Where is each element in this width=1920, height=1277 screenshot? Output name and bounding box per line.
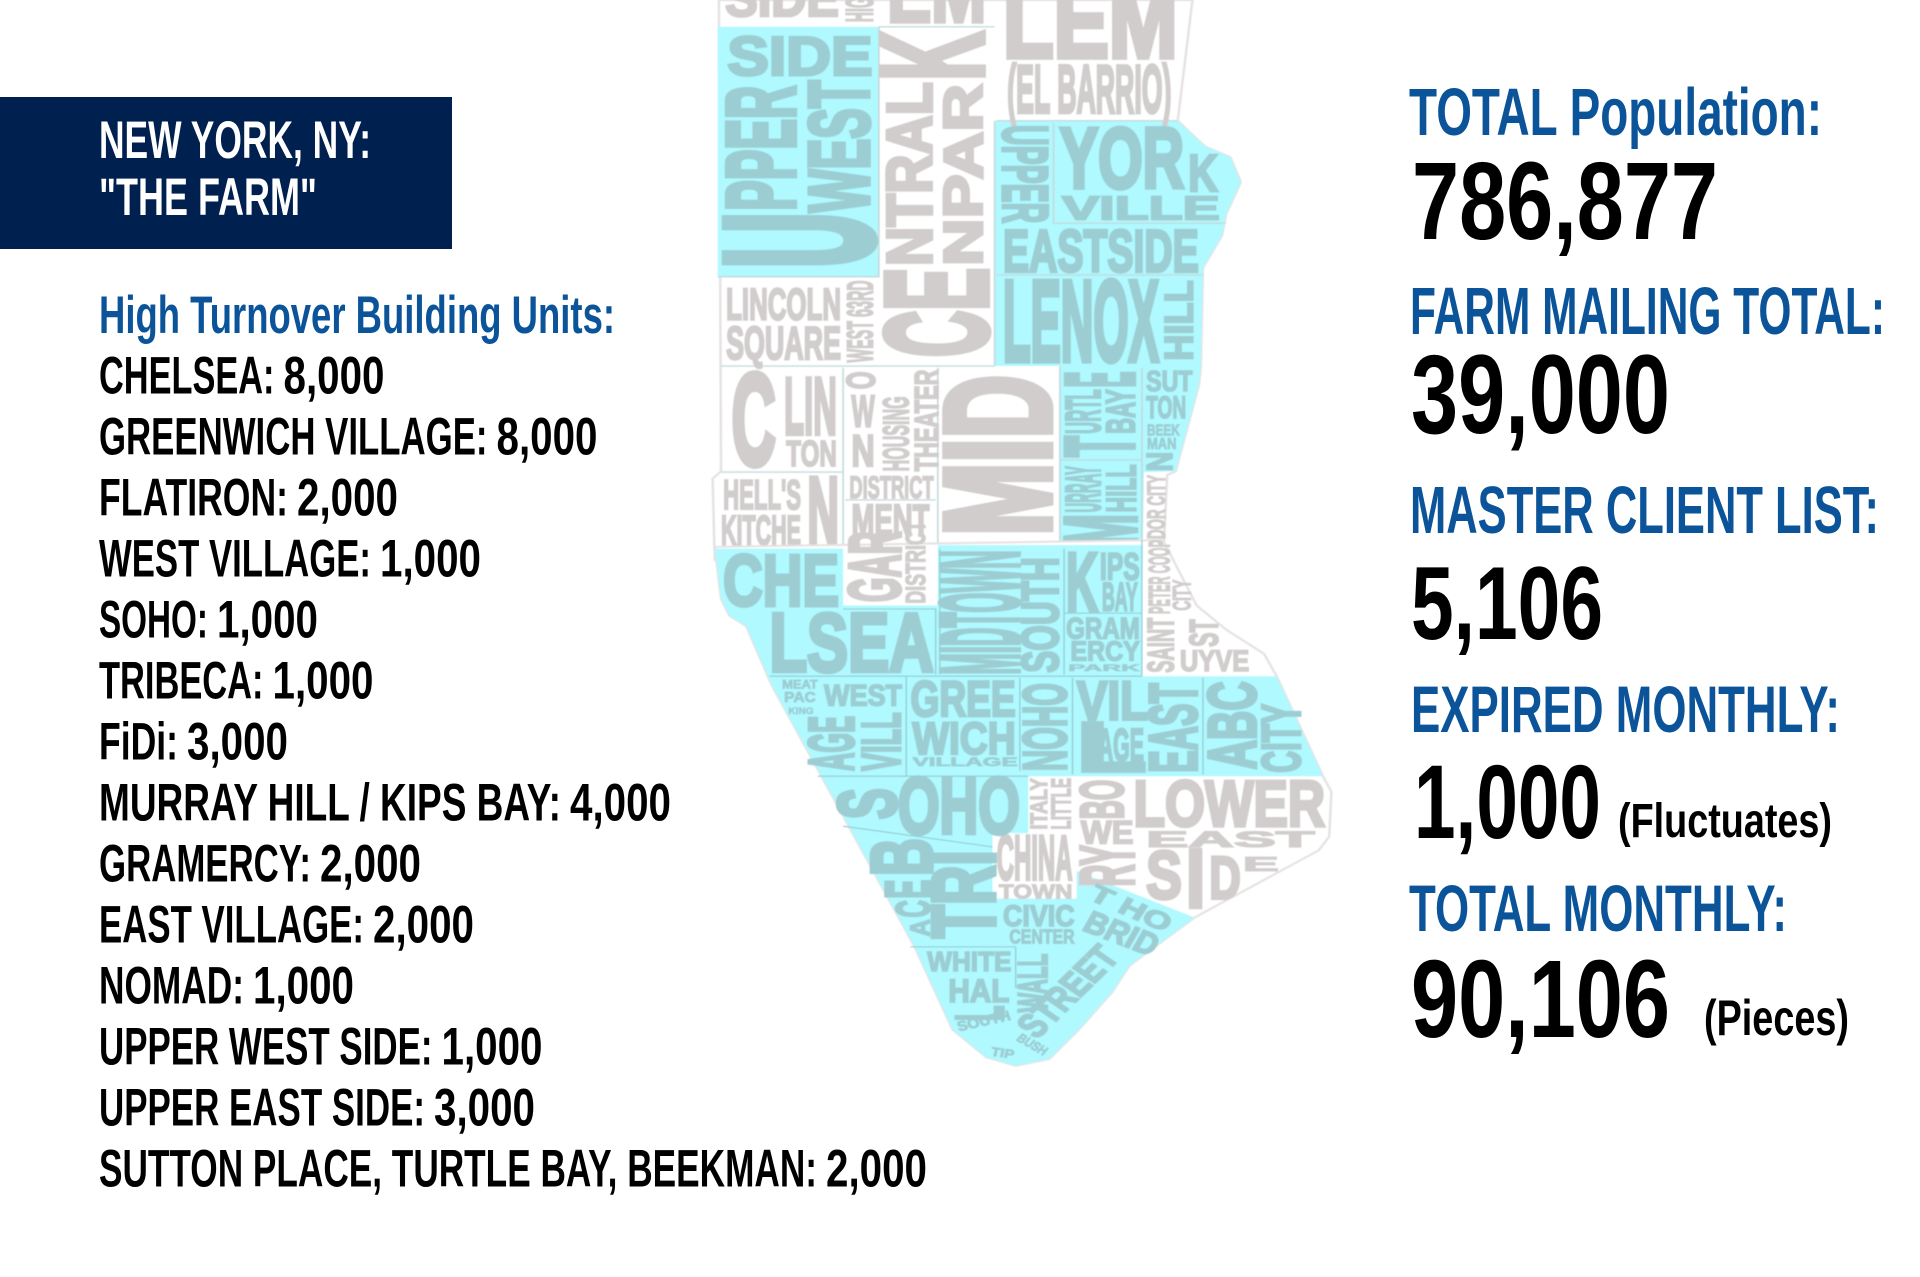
teal neighborhood labels lower: GREE [910,671,1016,727]
teal neighborhood labels lower: T HO [1084,880,1178,937]
teal neighborhood labels lower: BUSH [1014,1030,1051,1058]
map lower section [715,521,1331,1066]
teal neighborhood labels upper: EASTSIDE [1003,217,1199,284]
stat: total monthly: 90,106 [1411,938,1670,1061]
teal neighborhood labels upper: T [1046,436,1155,457]
list: building units by neighborhood: 2,000 [373,896,474,955]
list: building units by neighborhood: 4,000 [570,774,671,833]
teal neighborhood labels lower: C [887,900,940,918]
gray neighborhood labels upper: MID [915,375,1082,536]
teal neighborhood labels lower: SOUTH [955,1008,1013,1035]
stat: total monthly: (Pieces) [1704,990,1849,1046]
gray neighborhood labels lower: TOWN [999,881,1072,903]
list: building units by neighborhood: 3,000 [187,713,288,772]
teal neighborhood labels lower: VILL [850,712,912,771]
gray neighborhood labels upper [721,0,1178,566]
gray neighborhood labels lower [834,521,1325,925]
teal neighborhood labels upper: HILL [1157,280,1201,361]
teal neighborhood labels upper: WEST [791,80,887,212]
heading: high turnover building units: High Turnover Building Units: [99,286,615,345]
list: building units by neighborhood: CHELSEA: [99,347,274,406]
gray neighborhood labels upper: THEATER [908,370,945,471]
teal neighborhood labels upper: MAN [1147,435,1176,453]
gray neighborhood labels upper: MENT [852,496,930,546]
teal neighborhood labels lower: GRAM [1066,612,1140,645]
teal neighborhood labels upper: URRAY [1056,466,1111,512]
title banner [0,97,452,249]
teal neighborhood labels lower: CHE [723,541,839,622]
teal neighborhood labels lower: CENTER [1009,925,1075,948]
gray neighborhood labels lower: BO [1068,780,1136,819]
stat: total population: 786,877 [1412,140,1718,263]
map upper section [682,0,1241,566]
list: building units by neighborhood: SOHO: [99,591,208,650]
teal neighborhood labels upper: UPPER [989,125,1061,223]
teal neighborhood labels lower: L [1077,707,1146,786]
list: building units by neighborhood: WEST VILLAGE: [99,530,371,589]
teal neighborhood labels lower: STREET [1008,938,1128,1045]
highlighted zones lower [715,545,1323,1066]
teal neighborhood labels lower: VILLAGE [913,754,1018,769]
teal neighborhood labels upper: M [1044,514,1157,546]
list: building units by neighborhood: GREENWICH VILLAGE: [99,408,487,467]
title text: "THE FARM" [99,168,317,227]
gray neighborhood labels lower: LOWER [1134,768,1325,841]
list: building units by neighborhood: 3,000 [434,1079,535,1138]
map upper section: LENOX [1003,258,1159,385]
gray neighborhood labels upper: N [807,459,839,566]
teal neighborhood labels lower: EAST [1136,683,1212,773]
gray neighborhood labels lower: ITALY [1025,778,1053,830]
teal neighborhood labels upper: HILL [1099,464,1145,512]
teal neighborhood labels lower: WHITE [927,946,1011,977]
gray neighborhood labels lower: GAR [834,531,916,602]
teal neighborhood labels lower: AGE [1098,719,1144,771]
teal neighborhood labels lower: ABC [1195,681,1271,769]
stat: farm mailing total [1410,274,1885,457]
list: building units by neighborhood: 2,000 [826,1140,927,1199]
list: building units by neighborhood: 1,000 [442,1018,542,1077]
map: Manhattan neighborhoods typographic map [682,0,1331,1066]
gray neighborhood labels upper: TON [786,434,837,474]
list: building units by neighborhood: FiDi: [99,713,178,772]
teal neighborhood labels lower: WALL [1010,954,1057,1012]
list: building units by neighborhood: 1,000 [253,957,354,1016]
gray neighborhood labels upper: HOUSING [877,396,917,471]
teal neighborhood labels lower: HAL [948,972,1009,1009]
teal neighborhood labels lower: LSEA [769,596,934,689]
list: building units by neighborhood: UPPER WEST SIDE: [99,1018,432,1077]
teal neighborhood labels upper [682,26,1220,546]
teal neighborhood labels lower: B [854,838,950,876]
gray neighborhood labels upper: HELL'S [723,471,801,518]
teal neighborhood labels lower [723,535,1312,1061]
gray neighborhood labels lower: CHINA [997,823,1072,893]
teal neighborhood labels lower: E [874,880,944,899]
teal neighborhood labels lower: K [1066,535,1098,629]
teal neighborhood labels lower: A [905,919,936,937]
island outline upper [713,0,1241,560]
stat: farm mailing total: 39,000 [1411,332,1670,457]
list: building units by neighborhood: 8,000 [496,408,598,467]
gray neighborhood labels lower: RY [1065,845,1150,887]
teal neighborhood labels lower: TRI [916,850,1014,938]
teal neighborhood labels lower: TIP [990,1044,1016,1061]
teal neighborhood labels lower: PARK [1068,664,1142,674]
gray neighborhood labels lower: LITTLE [1046,778,1077,830]
teal neighborhood labels upper: U [682,212,915,268]
gray neighborhood labels upper: KITCHE [721,507,801,554]
teal neighborhood labels lower: NOHO [1011,683,1079,771]
list: building units by neighborhood: 1,000 [380,530,481,589]
gray neighborhood labels lower: ST [1182,619,1226,647]
highlighted zones upper [718,27,1241,550]
stat: total monthly [1409,871,1849,1061]
map: Manhattan neighborhoods typographic map: MIDTOWN [919,550,1042,674]
teal neighborhood labels lower: MEAT [782,677,818,691]
stat: master client list: 5,106 [1411,546,1603,662]
list: building units by neighborhood: 2,000 [320,835,421,894]
stat: expired monthly [1411,672,1840,861]
gray neighborhood labels lower: I [1186,832,1205,925]
teal neighborhood labels upper: N [1141,452,1181,471]
list: building units by neighborhood [99,347,927,1199]
gray neighborhood labels upper: TUDOR CITY [1142,475,1170,557]
gray neighborhood labels upper: NPAR [932,84,994,266]
teal neighborhood labels upper: BEEK [1147,421,1180,439]
list: building units by neighborhood: SUTTON PLACE, TURTLE BAY, BEEKMAN: [99,1140,817,1199]
teal neighborhood labels lower: BRID [1077,905,1165,963]
gray neighborhood labels upper: LIN [784,362,837,451]
gray neighborhood labels lower: SAINT [1142,617,1182,673]
teal neighborhood labels lower: CITY [1249,704,1312,773]
list: building units by neighborhood: FLATIRON: [99,469,288,528]
gray neighborhood labels upper: WEST 63RD [841,280,881,362]
map: Manhattan neighborhoods typographic map: (EL BARRIO) [1007,51,1171,127]
gray neighborhood labels upper: DISTRICT [849,471,934,505]
teal neighborhood labels upper: VILLE [1062,189,1220,227]
stat: expired monthly: (Fluctuates) [1618,795,1832,848]
list: building units by neighborhood: 1,000 [272,652,374,711]
list: building units by neighborhood: NOMAD: [99,957,244,1016]
list: building units by neighborhood: GRAMERCY: [99,835,311,894]
stat: total population [1409,75,1822,263]
list: building units by neighborhood: TRIBECA: [99,652,264,711]
teal neighborhood labels lower: L [943,1005,1018,1021]
gray neighborhood labels lower: WE [1081,814,1134,851]
teal neighborhood labels upper: SIDE [727,26,873,87]
teal neighborhood labels lower: AGE [797,716,868,771]
list: building units by neighborhood: UPPER EAST SIDE: [99,1079,425,1138]
teal neighborhood labels upper: E [1046,371,1155,387]
gray neighborhood labels upper: W [852,387,875,437]
teal neighborhood labels lower: WEST [824,680,902,713]
teal neighborhood labels lower: S [821,788,913,819]
list: building units by neighborhood: 2,000 [297,469,398,528]
teal neighborhood labels lower: KING [788,707,814,717]
teal neighborhood labels lower: OHO [898,760,1020,850]
teal neighborhood labels lower: BAY [1102,576,1138,620]
gray neighborhood labels lower: DISTRICT [901,521,932,604]
list: building units by neighborhood: MURRAY HILL / KIPS BAY: [99,774,561,833]
teal neighborhood labels lower: PAC [784,689,816,706]
teal neighborhood labels lower: WICH [913,713,1016,764]
gray neighborhood labels upper: CE [857,268,1017,357]
teal neighborhood labels lower: CIVIC [1003,900,1075,933]
teal neighborhood labels upper: SUT [1146,365,1192,397]
title text: NEW YORK, NY: [99,111,371,170]
gray neighborhood labels lower: EAST [1146,827,1315,852]
teal neighborhood labels upper: BAY [1098,389,1143,434]
gray neighborhood labels lower: CITY [1167,579,1196,611]
teal neighborhood labels upper: YOR [1060,110,1184,206]
gray neighborhood labels lower: D [1209,845,1241,912]
teal neighborhood labels lower: IPS [1100,546,1140,588]
stat: expired monthly: 1,000 [1414,744,1601,861]
teal neighborhood labels upper: K [1188,144,1218,202]
title text [99,111,371,227]
gray neighborhood labels upper: SQUARE [726,317,841,369]
teal neighborhood labels lower: VIL [1077,670,1148,732]
teal neighborhood labels upper: URTL [1056,389,1111,434]
teal neighborhood labels lower: ERCY [1070,636,1140,667]
teal neighborhood labels lower: SOUTH [1012,557,1070,673]
list: building units by neighborhood: 1,000 [217,591,318,650]
teal neighborhood labels upper: TON [1146,390,1186,425]
island outline lower [715,540,1331,1066]
list: building units by neighborhood: 8,000 [284,347,384,406]
stat: master client list [1410,473,1879,662]
gray neighborhood labels lower: PETER COOP [1143,540,1176,614]
gray neighborhood labels lower: S [1146,838,1182,913]
gray neighborhood labels upper: C [732,348,776,493]
gray neighborhood labels upper: N [852,427,875,476]
gray neighborhood labels upper: O [839,371,883,389]
gray neighborhood labels upper: LINCOLN [726,280,841,330]
list: building units by neighborhood: EAST VILLAGE: [99,896,364,955]
gray neighborhood labels upper: NTRAL [873,82,946,266]
gray neighborhood labels lower: E [1243,853,1279,875]
gray neighborhood labels lower: UYVE [1180,645,1249,678]
